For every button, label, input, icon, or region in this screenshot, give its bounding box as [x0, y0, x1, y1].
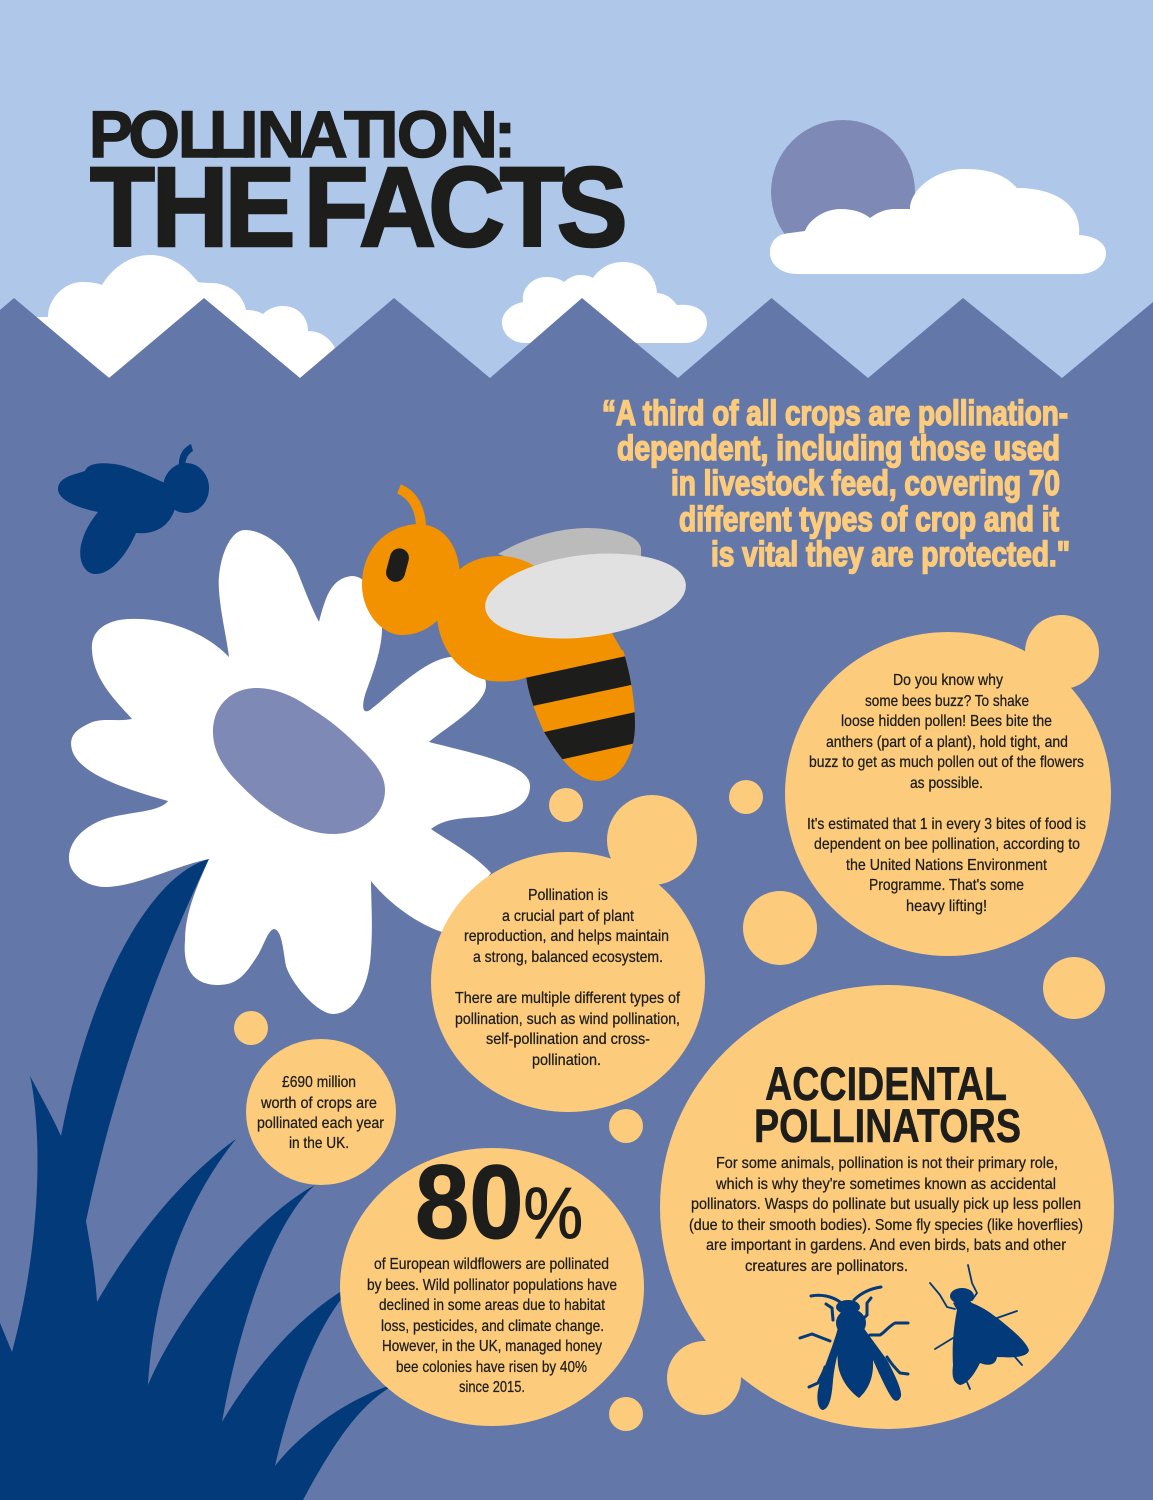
panel: 690 million: in the UK.: [289, 1135, 349, 1152]
panel: why bees buzz: [785, 615, 1111, 956]
panel: what is pollination: There are multiple different types of: [455, 990, 680, 1007]
body text: which is why they're sometimes known as accidental: [715, 1176, 1056, 1193]
icon: wasp: [800, 1287, 908, 1410]
body text: [689, 1155, 1083, 1275]
panel: what is pollination: Pollination is: [528, 887, 608, 904]
sun: [771, 120, 915, 264]
panel: why bees buzz: It's estimated that 1 in every 3 bites of food is: [807, 816, 1086, 833]
panel: what is pollination: self-pollination and cross-: [486, 1031, 650, 1048]
panel: why bees buzz: anthers (part of a plant), hold tight, and: [826, 734, 1068, 751]
panel: 80 percent: by bees. Wild pollinator populations have: [367, 1277, 617, 1294]
icon: small bee silhouette: [58, 444, 209, 574]
quote: in livestock feed, covering 70: [671, 464, 1060, 503]
stem and grass: [0, 859, 400, 1500]
panel: 690 million: worth of crops are: [260, 1095, 377, 1112]
panel: 690 million: [246, 1039, 396, 1185]
panel: 690 million: pollinated each year: [257, 1115, 385, 1132]
cloud: upper right: [770, 169, 1106, 274]
stat: 80%: 80%: [415, 1144, 583, 1261]
title: POLLINATION:: [89, 97, 516, 171]
panel: 80 percent: declined in some areas due to habitat: [379, 1297, 605, 1314]
panel: what is pollination: reproduction, and helps maintain: [464, 928, 669, 945]
panel: why bees buzz: some bees buzz? To shake: [865, 693, 1029, 710]
flower: [69, 530, 530, 1014]
sky: [0, 0, 1153, 380]
quote: dependent, including those used: [617, 429, 1060, 468]
panel: 80 percent: of European wildflowers are pollinated: [374, 1256, 609, 1273]
heading: ACCIDENTAL: [765, 1057, 1007, 1110]
panel: 80 percent: since 2015.: [459, 1379, 525, 1396]
panel: why bees buzz: Do you know why: [893, 672, 1003, 689]
panel: why bees buzz: buzz to get as much pollen out of the flowers: [809, 754, 1084, 771]
panel: 80 percent: bee colonies have risen by 40%: [396, 1359, 587, 1376]
panel: accidental pollinators: [660, 985, 1114, 1429]
title: THE FACTS: [90, 145, 628, 271]
panel: why bees buzz: heavy lifting!: [906, 898, 987, 915]
panel: 80 percent: [340, 1144, 644, 1426]
panel: what is pollination: a strong, balanced ecosystem.: [473, 949, 663, 966]
heading: POLLINATORS: [754, 1099, 1021, 1152]
panel: what is pollination: pollination, such as wind pollination,: [455, 1011, 680, 1028]
mountains: [0, 298, 1153, 500]
panel: what is pollination: [431, 795, 705, 1112]
body text: pollinators. Wasps do pollinate but usually pick up less pollen: [691, 1196, 1081, 1213]
icon: large bee: [362, 489, 691, 781]
panel: 80 percent: loss, pesticides, and climate change.: [381, 1318, 604, 1335]
panel: what is pollination: a crucial part of plant: [502, 908, 634, 925]
cloud: left: [30, 255, 335, 378]
panel: 80 percent: However, in the UK, managed honey: [382, 1338, 602, 1355]
panel: why bees buzz: dependent on bee pollination, according to: [814, 836, 1080, 853]
quote: different types of crop and it: [679, 500, 1059, 539]
body text: are important in gardens. And even birds, bats and other: [706, 1237, 1067, 1254]
panel: what is pollination: pollination.: [532, 1052, 601, 1069]
quote: is vital they are protected.": [711, 535, 1070, 574]
panel: 690 million: £690 million: [282, 1074, 356, 1091]
quote: [602, 394, 1070, 574]
panel: why bees buzz: as possible.: [910, 775, 983, 792]
cloud: centre: [502, 262, 707, 343]
heading: [754, 1057, 1021, 1152]
icon: fly: [930, 1265, 1029, 1389]
bubble: decorative dots: [234, 780, 1105, 1431]
panel: why bees buzz: Programme. That's some: [869, 877, 1024, 894]
flower centre: [213, 688, 385, 834]
body text: creatures are pollinators.: [745, 1258, 908, 1275]
panel: why bees buzz: loose hidden pollen! Bees bite the: [841, 713, 1052, 730]
panel: why bees buzz: the United Nations Environment: [846, 857, 1047, 874]
body text: For some animals, pollination is not their primary role,: [716, 1155, 1058, 1172]
body text: (due to their smooth bodies). Some fly species (like hoverflies): [689, 1217, 1083, 1234]
